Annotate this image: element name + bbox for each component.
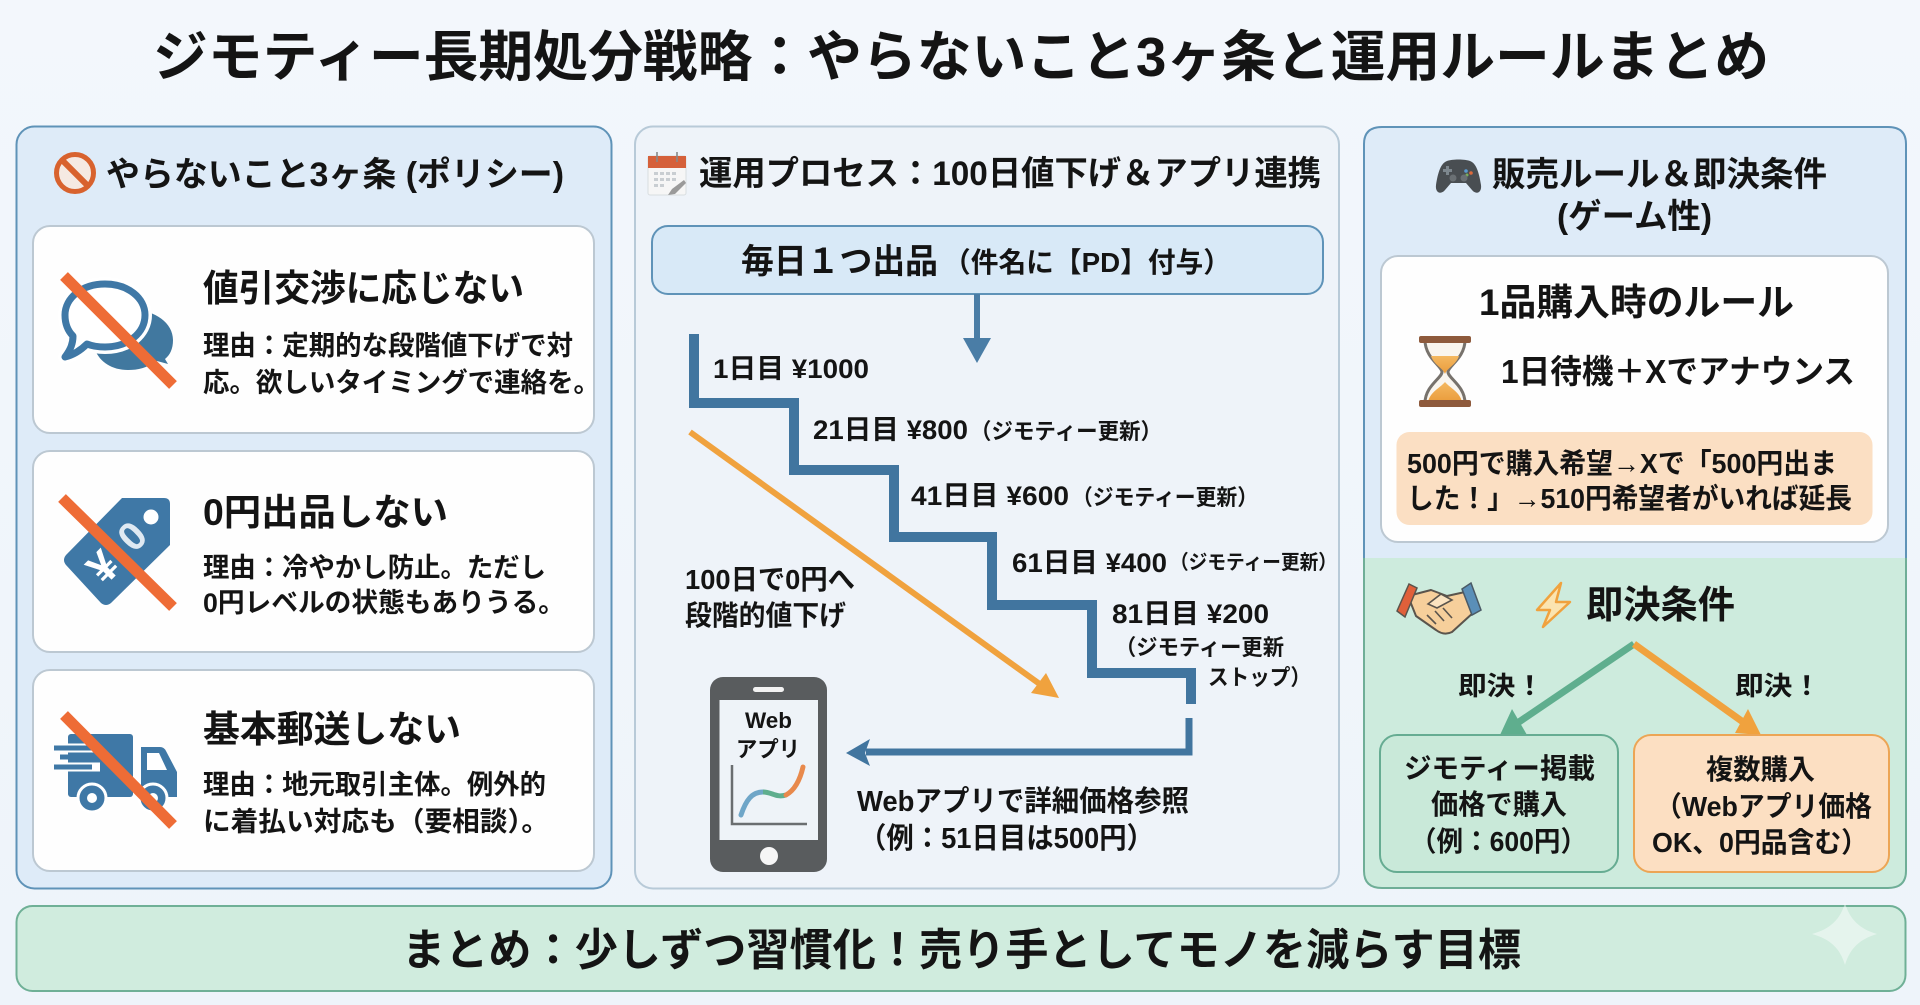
option box: 複数購入: 複数購入 — [1706, 754, 1815, 785]
card reason: に着払い対応も（要相談）。 — [203, 807, 549, 837]
option box: ジモティー掲載価格で購入: 価格で購入 — [1431, 789, 1567, 820]
icon: price tag crossed out — [62, 498, 173, 607]
price steps: （ジモティー更新） — [1072, 485, 1258, 510]
panel: 運用プロセス — [635, 126, 1339, 888]
icon: sparkle — [1812, 903, 1877, 965]
arrow: diagonal trend — [690, 432, 1059, 698]
card reason — [203, 553, 565, 618]
icon: hourglass — [1419, 336, 1471, 407]
icon: game controller — [1436, 160, 1481, 193]
price steps: 21日目 ¥800 — [813, 415, 968, 445]
card reason: 理由：地元取引主体。例外的 — [203, 770, 546, 800]
card reason: 理由：冷やかし防止。ただし — [203, 553, 546, 583]
label: Webアプリで詳細価格参照: （例：51日目は500円） — [859, 822, 1154, 855]
icon: price tag crossed out: 0 — [109, 513, 156, 560]
icon: smartphone with web app — [710, 677, 827, 872]
card: 値引交渉に応じない — [33, 226, 600, 433]
label: Webアプリで詳細価格参照 — [857, 785, 1189, 855]
card reason — [203, 770, 549, 837]
option box: 複数購入: OK、0円品含む） — [1652, 827, 1868, 858]
process box: 毎日1つ出品: （件名に【PD】付与） — [943, 247, 1231, 278]
price steps: 41日目 ¥600 — [911, 481, 1069, 511]
section: 即決条件 — [1364, 559, 1906, 888]
card title: 値引交渉に応じない — [203, 268, 524, 309]
panel: 販売ルール＆即決条件 — [1364, 127, 1906, 888]
card reason: 応。欲しいタイミングで連絡を。 — [203, 367, 600, 398]
summary banner — [16, 906, 1906, 991]
label: 即決 left: 即決！ — [1458, 671, 1544, 701]
card title: 基本郵送しない — [203, 709, 461, 750]
process box: 毎日1つ出品 — [652, 226, 1323, 294]
arrow: to ジモティー掲載 — [1500, 644, 1634, 735]
summary banner: まとめ：少しずつ習慣化！売り手としてモノを減らす目標 — [402, 926, 1521, 975]
icon: delivery truck crossed out — [54, 715, 177, 825]
label: 即決 right: 即決！ — [1735, 671, 1821, 701]
panel heading: やらないこと3ヶ条 (ポリシー) — [106, 156, 564, 194]
card title: 1品購入時のルール — [1479, 282, 1794, 323]
label: Webアプリで詳細価格参照: Webアプリで詳細価格参照 — [857, 785, 1189, 818]
price steps — [713, 354, 1337, 690]
option box: ジモティー掲載価格で購入: ジモティー掲載 — [1404, 753, 1595, 784]
card reason: 0円レベルの状態もありうる。 — [203, 588, 565, 618]
rule text: 1日待機＋Xでアナウンス — [1501, 353, 1855, 390]
arrow: down — [963, 294, 991, 363]
card reason: 理由：定期的な段階値下げで対 — [203, 331, 573, 361]
panel heading: 運用プロセス：100日値下げ＆アプリ連携 — [699, 155, 1321, 193]
price steps: 81日目 ¥200 — [1112, 599, 1269, 629]
option box: 複数購入 — [1634, 735, 1889, 872]
icon: speech bubbles crossed out — [64, 276, 173, 385]
callout: example: 500円で購入希望→Xで「500円出ま — [1407, 448, 1837, 479]
option box: ジモティー掲載価格で購入 — [1380, 735, 1618, 872]
card: 0円出品しない — [33, 451, 594, 652]
option box: ジモティー掲載価格で購入: （例：600円） — [1410, 826, 1587, 857]
label: 100日で0円へ — [685, 564, 855, 631]
arrow: to 複数購入 — [1634, 644, 1761, 735]
icon: price tag crossed out: ¥ — [77, 541, 130, 593]
callout: example — [1396, 432, 1872, 525]
icon: smartphone with web app: Web — [745, 708, 792, 733]
label: 100日で0円へ: 100日で0円へ — [685, 564, 855, 595]
label: 100日で0円へ: 段階的値下げ — [685, 600, 846, 631]
panel heading: (ゲーム性) — [1557, 198, 1712, 236]
price steps: 1日目 ¥1000 — [713, 354, 869, 384]
icon: calendar — [648, 152, 686, 195]
chart: price staircase — [694, 334, 1191, 704]
card: 1品購入時のルール — [1381, 256, 1888, 542]
callout: example: した！」→510円希望者がいれば延長 — [1407, 482, 1852, 514]
card: 基本郵送しない — [33, 670, 594, 871]
icon: handshake — [1397, 583, 1481, 634]
icon: lightning bolt — [1537, 583, 1570, 627]
process box: 毎日1つ出品: 毎日１つ出品 — [741, 243, 938, 281]
card title: 0円出品しない — [203, 492, 448, 533]
price steps: （ジモティー更新） — [1170, 551, 1337, 574]
title: ジモティー長期処分戦略：やらないこと3ヶ条と運用ルールまとめ — [153, 26, 1769, 88]
panel heading — [1492, 156, 1827, 236]
section heading: 即決条件 — [1586, 585, 1735, 627]
card reason — [203, 331, 600, 398]
price steps: 61日目 ¥400 — [1012, 548, 1167, 578]
price steps: （ジモティー更新 — [1115, 635, 1284, 660]
icon: prohibition sign — [56, 154, 94, 192]
arrow: to web app — [846, 718, 1189, 766]
panel: やらないこと3ヶ条 — [16, 126, 612, 888]
price steps: ストップ） — [1208, 665, 1311, 690]
icon: smartphone with web app: アプリ — [736, 737, 800, 762]
option box: 複数購入: （Webアプリ価格 — [1655, 791, 1872, 822]
panel heading: 販売ルール＆即決条件 — [1492, 156, 1827, 194]
price steps: （ジモティー更新） — [970, 419, 1162, 444]
